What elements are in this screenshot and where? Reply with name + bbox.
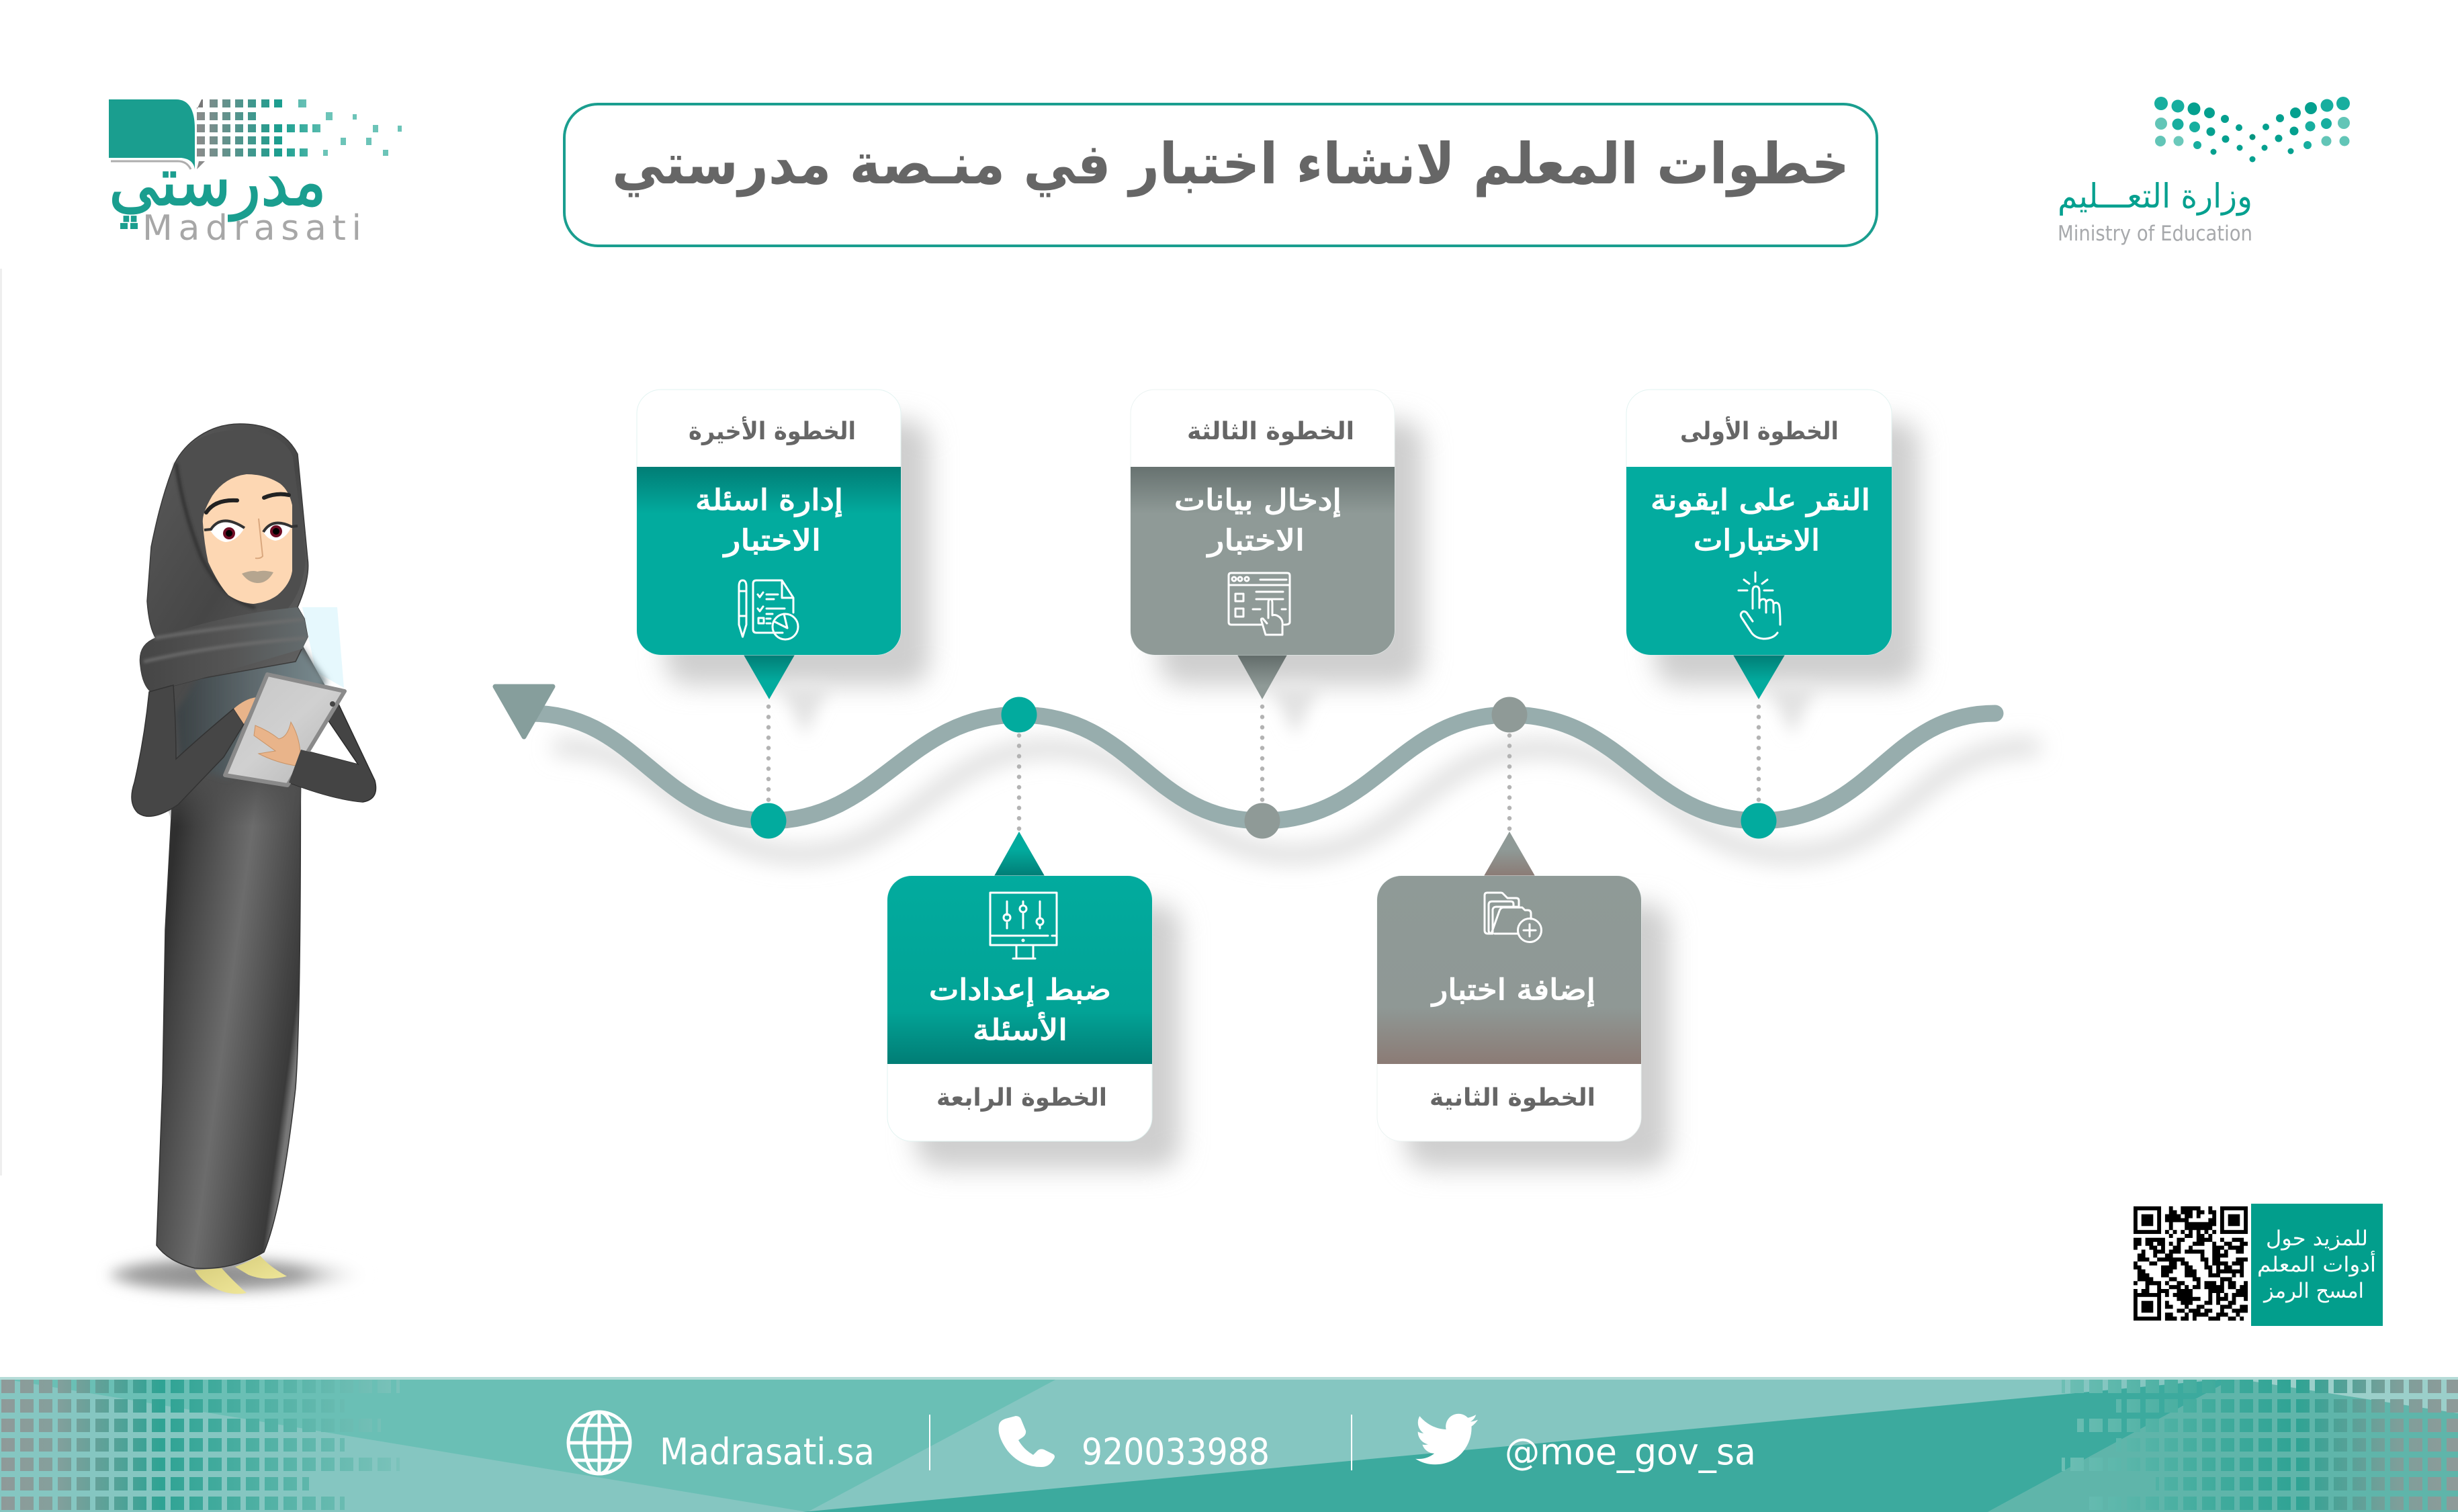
road: wavy timeline	[531, 713, 1995, 821]
nose	[255, 519, 263, 558]
scarf folds	[140, 607, 308, 692]
QR caption panel: أدوات المعلم	[2257, 1251, 2376, 1277]
icon: open book	[109, 99, 205, 169]
near hand	[234, 697, 257, 724]
dotted connectors	[769, 707, 1759, 830]
title text: خطوات المعلم لانشاء اختبار في منـصة مدرستي	[612, 131, 1849, 197]
footer band	[0, 1377, 2458, 1512]
step title	[1651, 484, 1870, 558]
step label: الخطوة الأخيرة	[689, 416, 856, 445]
step title: الاختبار	[723, 524, 821, 558]
ministry english name: Ministry of Education	[2058, 222, 2252, 246]
screen glow	[302, 607, 344, 688]
near arm	[132, 685, 244, 816]
panel: step 2 card	[1377, 832, 1641, 1141]
cuff	[289, 750, 363, 802]
logo latin name: Madrasati	[142, 208, 361, 249]
torso	[150, 645, 333, 826]
step label: الخطوة الثالثة	[1187, 418, 1354, 445]
step title	[929, 973, 1111, 1047]
phone number: 920033988	[1082, 1431, 1270, 1473]
floor shadow	[109, 1253, 391, 1296]
panel: step 3 card	[1131, 390, 1395, 699]
website: Madrasati.sa	[660, 1431, 875, 1473]
panel: step 4 card	[887, 832, 1152, 1141]
icon: checklist and pencil	[739, 580, 798, 639]
icon: monitor with sliders	[990, 893, 1057, 959]
timeline nodes	[751, 697, 1776, 838]
shadows of the cards and road	[561, 420, 2032, 1169]
eyes	[204, 521, 298, 542]
QR caption panel	[2251, 1204, 2383, 1326]
arrow head	[495, 686, 553, 737]
title box	[564, 104, 1877, 246]
step title: الاختبارات	[1694, 524, 1820, 558]
step title: إضافة اختبار	[1431, 973, 1595, 1007]
icon: tap hand	[1739, 572, 1780, 639]
step title: إدخال بيانات	[1174, 484, 1342, 517]
lips	[242, 571, 273, 583]
icon: folders with plus	[1485, 893, 1541, 942]
tablet	[225, 674, 345, 785]
step title: إدارة اسئلة	[695, 484, 843, 517]
ministry arabic name: وزارة التعـــليم	[2058, 177, 2252, 216]
QR caption panel: امسح الرمز	[2263, 1279, 2364, 1303]
icon: globe	[568, 1412, 630, 1474]
icon: phone	[999, 1416, 1055, 1467]
icon: twitter bird	[1415, 1414, 1478, 1464]
icon: pixel dots	[197, 99, 320, 157]
QR code block	[2134, 1204, 2383, 1326]
far arm	[289, 699, 376, 802]
step title: ضبط إعدادات	[929, 973, 1111, 1007]
panel: step 1 card	[1626, 390, 1892, 699]
step title	[1174, 484, 1342, 558]
logo: Madrasati	[109, 99, 402, 249]
QR caption panel: للمزيد حول	[2266, 1227, 2368, 1251]
step label: الخطوة الأولى	[1680, 416, 1839, 445]
step title: الأسئلة	[973, 1012, 1067, 1047]
holding hand	[254, 722, 300, 766]
step label: الخطوة الرابعة	[936, 1084, 1107, 1112]
icon: web form with hand	[1229, 573, 1290, 635]
step title: النقر على ايقونة	[1651, 484, 1870, 517]
chest shading	[176, 648, 327, 778]
eyebrows	[206, 494, 289, 513]
twitter handle: @moe_gov_sa	[1505, 1431, 1756, 1473]
logo arabic name: مدرستي	[109, 142, 326, 222]
logo: Ministry of Education	[2058, 97, 2350, 246]
icon: ministry dots	[2154, 97, 2350, 163]
character: teacher with tablet	[109, 424, 391, 1296]
hijab	[140, 424, 308, 692]
face	[203, 474, 292, 604]
panel: last step card	[637, 390, 901, 699]
robe skirt	[157, 699, 300, 1268]
step title: الاختبار	[1206, 524, 1305, 558]
step title	[695, 484, 843, 558]
step label: الخطوة الثانية	[1430, 1084, 1595, 1112]
separators	[930, 1415, 1352, 1470]
QR code	[2134, 1208, 2248, 1319]
shoes	[195, 1255, 287, 1294]
